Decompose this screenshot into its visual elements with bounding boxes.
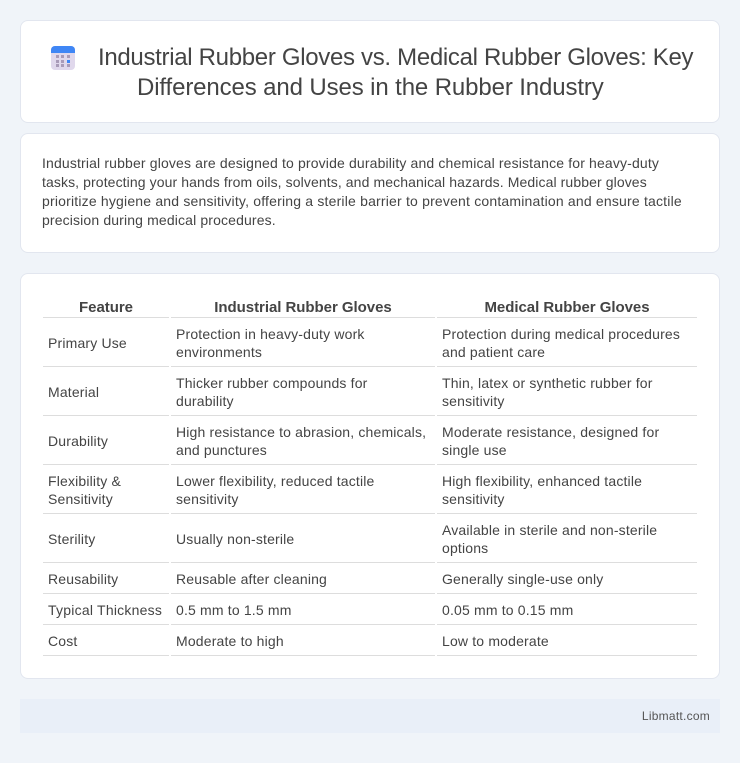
row: material xyxy=(48,375,653,409)
row: reusability xyxy=(48,571,604,587)
row: flexibility and sensitivity: High flexibility, enhanced tactile xyxy=(442,473,642,489)
row: cost: Cost xyxy=(48,633,77,649)
row: typical thickness: 0.5 mm to 1.5 mm xyxy=(176,602,292,618)
row: sterility: Usually non-sterile xyxy=(176,531,294,547)
footer credit: Libmatt.com xyxy=(642,709,710,723)
text block: introduction xyxy=(42,155,682,228)
row: durability xyxy=(48,424,659,458)
row: flexibility and sensitivity: Lower flexibility, reduced tactile xyxy=(176,473,374,489)
table header: Feature xyxy=(79,299,133,316)
row: primary use: and patient care xyxy=(442,344,545,360)
row: material: Thin, latex or synthetic rubber for xyxy=(442,375,653,391)
row: sterility: Available in sterile and non-sterile xyxy=(442,522,657,538)
row: flexibility and sensitivity: sensitivity xyxy=(176,491,239,507)
text block: introduction: tasks, protecting your hands from oils, solvents, and mechanical hazards. Medical rubber gloves xyxy=(42,174,647,190)
row: cost xyxy=(48,633,549,649)
row: typical thickness: Typical Thickness xyxy=(48,602,162,618)
row: material: Material xyxy=(48,384,99,400)
row: durability: High resistance to abrasion, chemicals, xyxy=(176,424,426,440)
row: primary use xyxy=(48,326,680,360)
row: reusability: Generally single-use only xyxy=(442,571,603,587)
row: cost: Low to moderate xyxy=(442,633,549,649)
text block: introduction: Industrial rubber gloves are designed to provide durability and chemical resistance for heavy-duty xyxy=(42,155,659,171)
row: typical thickness xyxy=(48,602,573,618)
title: Differences and Uses in the Rubber Industry xyxy=(137,74,604,101)
footer xyxy=(20,699,720,733)
row: flexibility and sensitivity: Flexibility & xyxy=(48,473,121,489)
row: material: sensitivity xyxy=(442,393,505,409)
icon: calendar xyxy=(51,46,75,70)
title xyxy=(98,44,694,101)
row: durability: single use xyxy=(442,442,507,458)
row: primary use: Primary Use xyxy=(48,335,127,351)
row: material: Thicker rubber compounds for xyxy=(176,375,368,391)
row: reusability: Reusability xyxy=(48,571,118,587)
row: sterility xyxy=(48,522,657,556)
row: durability: Durability xyxy=(48,433,108,449)
row: primary use: Protection in heavy-duty work xyxy=(176,326,365,342)
row: typical thickness: 0.05 mm to 0.15 mm xyxy=(442,602,573,618)
row: material: durability xyxy=(176,393,234,409)
row: sterility: Sterility xyxy=(48,531,95,547)
row: flexibility and sensitivity xyxy=(48,473,642,507)
text block: introduction: prioritize hygiene and sensitivity, offering a sterile barrier to prevent contamination and ensure tactile xyxy=(42,193,682,209)
table header xyxy=(79,299,650,316)
panel: introduction text xyxy=(20,133,720,253)
row: durability: Moderate resistance, designed for xyxy=(442,424,659,440)
row: flexibility and sensitivity: Sensitivity xyxy=(48,491,113,507)
row: durability: and punctures xyxy=(176,442,267,458)
row: primary use: Protection during medical procedures xyxy=(442,326,680,342)
panel: title header xyxy=(20,20,720,123)
row: primary use: environments xyxy=(176,344,262,360)
row: flexibility and sensitivity: sensitivity xyxy=(442,491,505,507)
row: cost: Moderate to high xyxy=(176,633,284,649)
title: Industrial Rubber Gloves vs. Medical Rubber Gloves: Key xyxy=(98,44,693,71)
row: reusability: Reusable after cleaning xyxy=(176,571,327,587)
row: sterility: options xyxy=(442,540,488,556)
table header: Industrial Rubber Gloves xyxy=(214,299,392,316)
panel: comparison table xyxy=(20,273,720,679)
table header: Medical Rubber Gloves xyxy=(484,299,650,316)
text block: introduction: precision during medical procedures. xyxy=(42,212,276,228)
